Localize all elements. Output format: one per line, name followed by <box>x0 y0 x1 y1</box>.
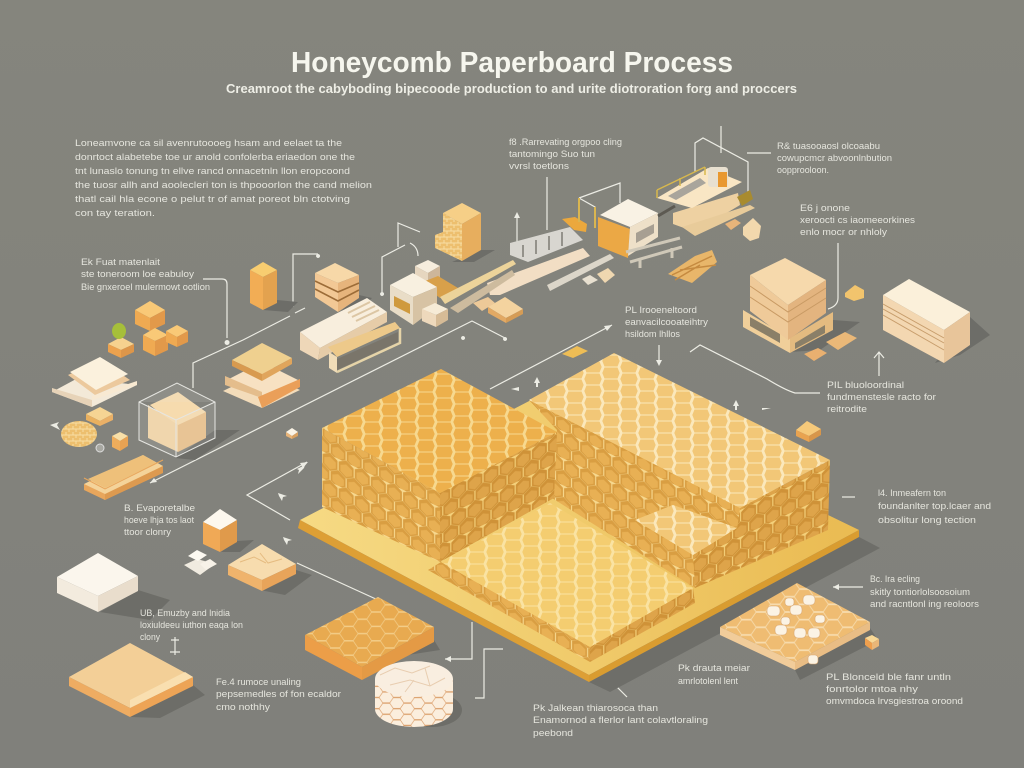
title: Honeycomb Paperboard Process <box>291 47 733 79</box>
intro text block: donrtoct alabetebe toe ur anold confolerba eriaedon one the <box>75 152 355 163</box>
label: pulp: UB, Emuzby and lnidia <box>140 608 231 619</box>
machine: long cream press <box>300 298 387 360</box>
machine: conveyor <box>440 248 590 313</box>
machine: gray roller unit <box>510 227 583 262</box>
icon: long plank <box>84 455 163 500</box>
icon: green plant with cube <box>108 323 134 358</box>
label: pressing: pepsemedles of fon ecaldor <box>216 689 341 700</box>
label: adhesive: Pk Jalkean thiarosoca than <box>533 703 658 714</box>
machine: orange arm <box>562 217 587 232</box>
icon: orange boxes <box>135 301 188 356</box>
white bits <box>767 595 825 664</box>
label: coordinate: PIL bluoloordinal <box>827 380 904 391</box>
label: forming <box>509 137 622 172</box>
label: distribution <box>777 141 892 176</box>
label: blended fibre: PL Blonceld ble fanr untln <box>826 672 951 683</box>
inner wall <box>529 400 740 588</box>
icon: palletised stack <box>743 258 860 353</box>
machine line <box>300 167 761 373</box>
icon: orange cube <box>203 509 254 552</box>
label: slurry: B. Evaporetalbe <box>124 503 195 514</box>
label: packing: xeroocti cs iaomeeorkines <box>800 215 915 226</box>
label: coating <box>870 574 979 610</box>
label: board: PL Irooeneltoord <box>625 305 697 316</box>
label: coordinate: reitrodite <box>827 404 867 415</box>
label: blended fibre <box>826 672 963 707</box>
label: raw materials <box>81 257 210 293</box>
icon: honeycomb cylinder <box>375 661 462 727</box>
subtitle: Creamroot the cabyboding bipecoode production to and urite diotroration forg and proccers <box>226 81 797 96</box>
label: adhesive <box>533 703 708 739</box>
label: pressing: Fe.4 rumoce unaling <box>216 677 301 688</box>
icon: flat board <box>69 643 205 718</box>
label: raw materials: Bie gnxeroel mulermowt ootlion <box>81 282 210 293</box>
icon: small loose parts <box>804 285 864 361</box>
icon: tan block <box>228 544 312 595</box>
right honeycomb block <box>529 353 830 588</box>
small stack under line <box>473 297 523 323</box>
label: coating: and racntlonl ing reoloors <box>870 599 979 610</box>
icon: white bits <box>184 550 217 575</box>
label: pulp: loxiuldeeu iuthon eaqa lon <box>140 620 243 631</box>
icon: glass box with carton <box>139 383 240 460</box>
label: pressing <box>216 677 341 713</box>
icon: honeycomb tile with bits <box>720 583 878 680</box>
label: packing: enlo mocr or nhloly <box>800 227 887 238</box>
left honeycomb block <box>322 369 557 562</box>
label: slurry: ttoor clonry <box>124 527 171 538</box>
board shadow <box>589 537 880 692</box>
icon: chip pile <box>61 421 97 447</box>
label: pulp <box>140 608 243 643</box>
icon: small chip <box>286 428 298 439</box>
intro text block: con tay teration. <box>75 208 155 219</box>
icon: small cube right <box>865 635 879 650</box>
label: coordinate: fundmenstesle racto for <box>827 392 936 403</box>
main honeycomb board <box>298 353 880 692</box>
icon: honeycomb block <box>305 597 440 680</box>
label: inspection <box>878 488 991 526</box>
pallet <box>743 310 833 353</box>
icon: small cube centre right <box>796 421 821 442</box>
lower step <box>635 505 737 555</box>
wood pile <box>668 250 717 283</box>
icon: tiny white bits <box>96 444 104 452</box>
label: coordinate <box>827 380 936 415</box>
icon: pulp white block <box>57 553 170 620</box>
label: adhesive: peebond <box>533 728 573 739</box>
label: forming: f8 .Rarrevating orgpoo cling <box>509 137 622 148</box>
label: inspection: foundanlter top.lcaer and <box>878 501 991 512</box>
machine: second conveyor <box>547 254 615 291</box>
intro text block: tnt lunaslo tonung tn ellve rancd onnacetnln llon eropcoond <box>75 166 350 177</box>
label: board: hsildom lhllos <box>625 329 680 340</box>
label: adhesive: Enamornod a flerlor lant colavtloraling <box>533 715 708 726</box>
small arrowheads <box>50 212 839 688</box>
label: distribution: oopprooloon. <box>777 165 829 176</box>
label: packing <box>800 203 915 238</box>
icon: tall orange block <box>250 262 298 312</box>
connector lines and arrows <box>150 126 884 698</box>
label: board: eanvacilcooateihtry <box>625 317 708 328</box>
label: coating: skitly tontiorlolsoosoium <box>870 587 970 598</box>
small cartons right <box>725 218 761 241</box>
icon: stack of layered boards <box>223 343 300 408</box>
label: forming: tantomingo Suo tun <box>509 149 595 160</box>
machine: upper platform <box>657 167 755 236</box>
icon: small pale box <box>86 407 113 426</box>
label: pressing: cmo nothhy <box>216 702 270 713</box>
icon: cream block <box>883 279 990 363</box>
labels <box>75 137 991 739</box>
label: blended fibre: omvmdoca lrvsgiestroa oroond <box>826 696 963 707</box>
icon: yellow tile <box>562 346 588 358</box>
intro text block: the tuosr allh and aoolecleri ton is thpooorlon the cand melion <box>75 180 372 191</box>
label: sheets: Pk drauta meiar <box>678 663 750 674</box>
machine: dark pipe <box>658 206 675 216</box>
label: pulp: clony <box>140 632 160 643</box>
intro text block: thatl cail hla econe o pelut tr of amat poreot bln ctotving <box>75 194 350 205</box>
label: distribution: cowupcmcr abvoonlnbution <box>777 153 892 164</box>
intro text block <box>75 138 372 219</box>
label: slurry <box>124 503 195 538</box>
label: raw materials: ste toneroom loe eabuloy <box>81 269 194 280</box>
outer wall <box>693 460 830 588</box>
honeycomb floor slab <box>428 503 695 662</box>
base plate <box>298 385 859 682</box>
label: distribution: R& tuasooaosl olcoaabu <box>777 141 880 152</box>
icon: stacked tan block <box>315 263 372 312</box>
label: sheets <box>678 663 750 687</box>
machine: curing oven <box>598 199 682 268</box>
label: inspection: obsolitur long tection <box>878 515 976 526</box>
label: slurry: hoeve lhja tos laot <box>124 515 194 526</box>
label: raw materials: Ek Fuat matenlait <box>81 257 160 268</box>
label: forming: vvrsl toetlons <box>509 161 569 172</box>
label: packing: E6 j onone <box>800 203 850 214</box>
label: sheets: amrlotolenl lent <box>678 676 738 687</box>
label: inspection: l4. Inmeafern ton <box>878 488 946 499</box>
icon: white stacked sheets <box>52 357 137 407</box>
label: blended fibre: fonrtolor mtoa nhy <box>826 684 918 695</box>
intro text block: Loneamvone ca sil avenrutoooeg hsam and eelaet ta the <box>75 138 342 149</box>
honey stack <box>435 203 495 262</box>
machine: wooden table <box>328 322 400 373</box>
icon: small orange cube <box>112 432 128 451</box>
label: board <box>625 305 708 340</box>
top face <box>529 353 830 508</box>
machine: forming unit <box>390 260 458 327</box>
label: coating: Bc. Ira ecling <box>870 574 920 585</box>
machine: yellow gantry <box>579 198 595 228</box>
